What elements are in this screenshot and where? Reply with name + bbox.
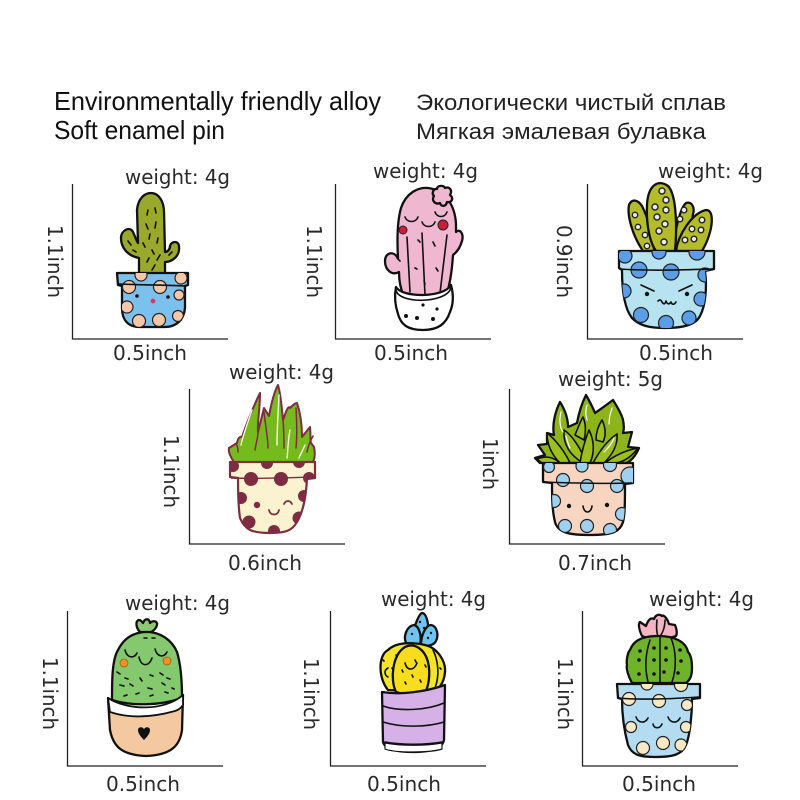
heading: Russian: Экологически чистый сплав — [416, 90, 726, 115]
panel: pin 3 succulent in blue pot: 0.5inch — [639, 341, 713, 365]
icon: pink cactus in white pot — [385, 186, 463, 330]
panel: pin 3 succulent in blue pot: 0.9inch — [552, 225, 576, 298]
panel: pin 5 rosette succulent in peach pot: weight: 5g — [558, 367, 663, 391]
icon: green cactus in tan pot with heart — [108, 619, 183, 756]
icon: round cactus in blue pot — [617, 615, 700, 757]
panel: pin 6 green dome cactus: 0.5inch — [106, 772, 180, 796]
panel: pin 7 yellow barrel cactus: 0.5inch — [367, 772, 441, 796]
panel: pin 8 round cactus with pink flower: 1.1inch — [553, 658, 577, 730]
panel: pin 6 green dome cactus — [38, 591, 230, 796]
panel: pin 7 yellow barrel cactus: weight: 4g — [381, 587, 486, 611]
icon: yellow cactus, blue buds and purple pot — [380, 613, 445, 752]
icon: four-leaf succulent with grumpy pot — [617, 183, 714, 330]
panel: pin 6 green dome cactus: weight: 4g — [125, 591, 230, 615]
panel: pin 8 round cactus with pink flower: weight: 4g — [649, 587, 754, 611]
panel: pin 2 pink cactus: 1.1inch — [302, 225, 326, 298]
heading: English: Environmentally friendly alloy — [54, 86, 381, 116]
panel: pin 6 green dome cactus: 1.1inch — [38, 657, 62, 730]
panel: pin 1 olive cactus: weight: 4g — [125, 165, 230, 189]
heading: Russian: Мягкая эмалевая булавка — [416, 119, 707, 144]
panel: pin 1 olive cactus: 0.5inch — [113, 341, 187, 365]
panel: pin 3 succulent in blue pot — [552, 159, 763, 365]
icon: olive cactus in blue pot — [117, 193, 188, 328]
panel: pin 8 round cactus with pink flower — [553, 587, 754, 796]
heading: English — [54, 86, 381, 145]
panel: pin 7 yellow barrel cactus: 1.1inch — [299, 658, 323, 730]
icon: heart — [138, 727, 150, 740]
panel: pin 4 spiky plant in cream pot: 0.6inch — [228, 551, 302, 575]
panel: pin 4 spiky plant in cream pot — [159, 360, 345, 575]
panel: pin 2 pink cactus: 0.5inch — [374, 341, 448, 365]
panel: pin 8 round cactus with pink flower: 0.5inch — [622, 772, 696, 796]
panel: pin 4 spiky plant in cream pot: 1.1inch — [159, 435, 183, 508]
heading: English: Soft enamel pin — [54, 115, 225, 145]
panel: pin 3 succulent in blue pot: weight: 4g — [658, 159, 763, 183]
panel: pin 5 rosette succulent in peach pot: 0.7inch — [558, 551, 632, 575]
icon: spiky green plant with winking pot — [227, 385, 315, 537]
panel: pin 7 yellow barrel cactus — [299, 587, 486, 796]
panel: pin 5 rosette succulent in peach pot: 1inch — [478, 438, 502, 490]
icon: green rosette with smiling pot — [535, 395, 639, 536]
panel: pin 2 pink cactus — [302, 159, 491, 365]
panel: pin 5 rosette succulent in peach pot — [478, 367, 665, 575]
panel: pin 2 pink cactus: weight: 4g — [373, 159, 478, 183]
panel: pin 1 olive cactus: 1.1inch — [43, 225, 67, 298]
panel: pin 1 olive cactus — [43, 165, 230, 365]
heading: Russian — [416, 90, 726, 144]
panel: pin 4 spiky plant in cream pot: weight: 4g — [229, 360, 334, 384]
